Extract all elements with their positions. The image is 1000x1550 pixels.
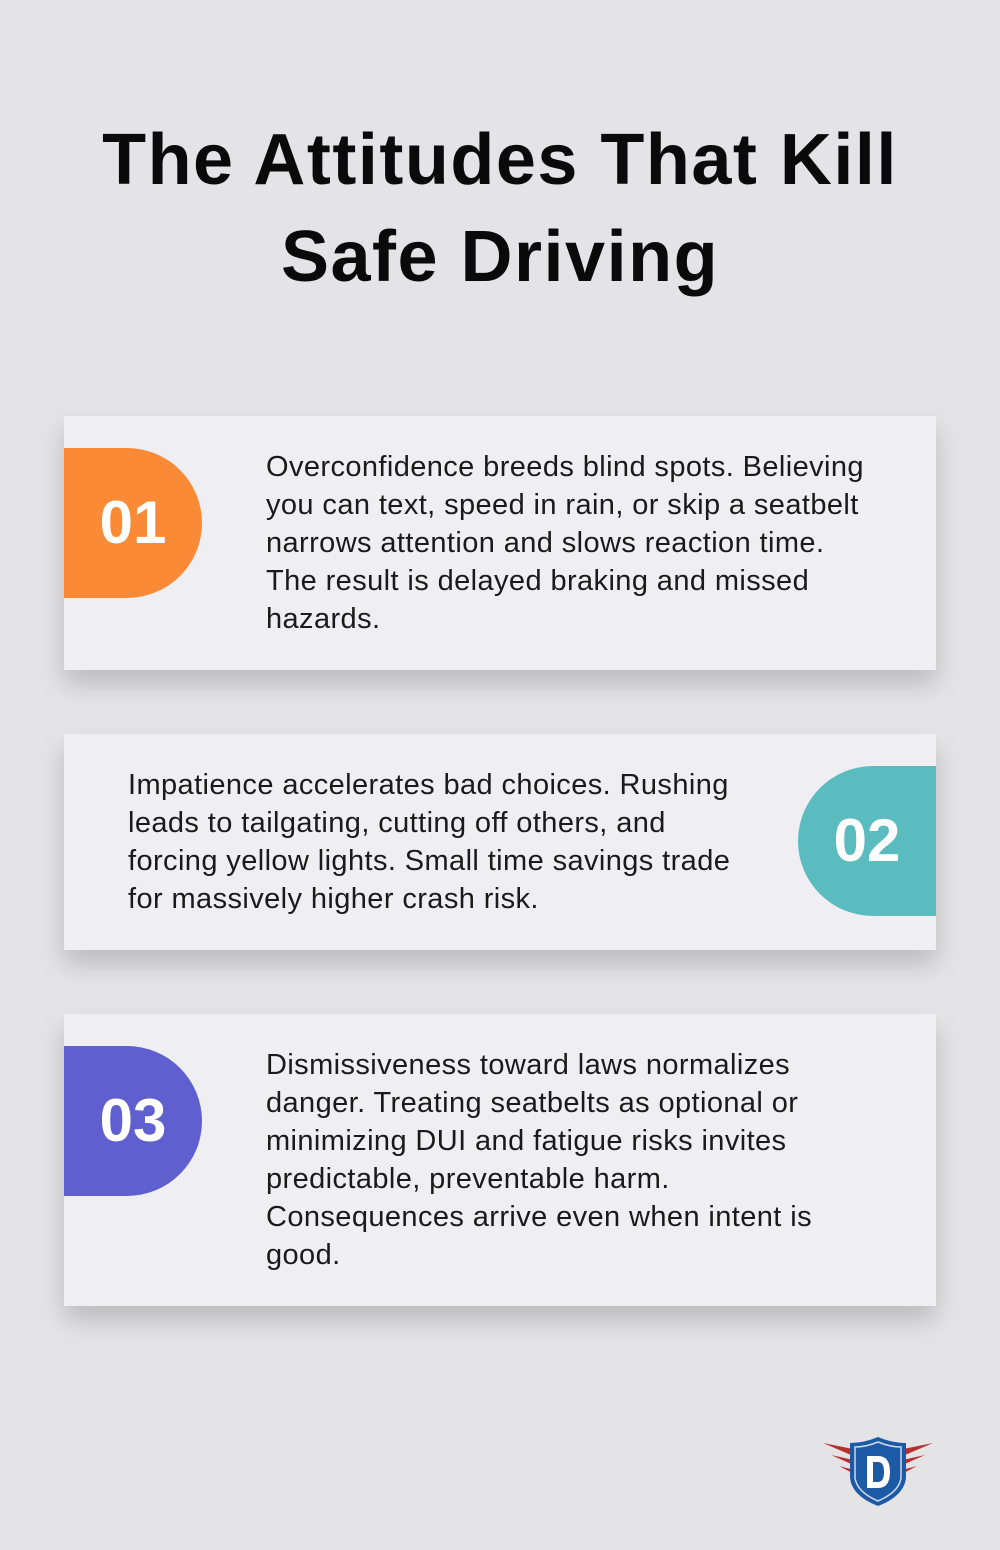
title: The Attitudes That Kill — [102, 120, 898, 200]
badge: 03 — [64, 1046, 202, 1196]
text: overconfidence: you can text, speed in rain, or skip a seatbelt — [266, 489, 859, 521]
text: dismissiveness: Consequences arrive even when intent is — [266, 1201, 812, 1233]
text: dismissiveness — [266, 1049, 812, 1271]
text: impatience — [128, 769, 730, 915]
text: dismissiveness: predictable, preventable harm. — [266, 1163, 670, 1195]
text: dismissiveness: good. — [266, 1239, 341, 1271]
text: impatience: for massively higher crash risk. — [128, 883, 539, 915]
title: Safe Driving — [281, 217, 719, 297]
title — [102, 120, 898, 297]
panel: card 01 — [64, 416, 936, 670]
text: overconfidence: hazards. — [266, 603, 380, 635]
text: dismissiveness: Dismissiveness toward laws normalizes — [266, 1049, 790, 1081]
text: impatience: leads to tailgating, cutting off others, and — [128, 807, 666, 839]
text: impatience: forcing yellow lights. Small time savings trade — [128, 845, 730, 877]
text: dismissiveness: minimizing DUI and fatigue risks invites — [266, 1125, 786, 1157]
badge: 01: 01 — [100, 489, 166, 556]
panel: card 03 — [64, 1014, 936, 1306]
panel: card 02 — [64, 734, 936, 950]
badge: 02: 02 — [834, 807, 900, 874]
text: overconfidence: narrows attention and slows reaction time. — [266, 527, 824, 559]
badge: 01 — [64, 448, 202, 598]
badge: 03: 03 — [100, 1087, 166, 1154]
text: overconfidence: Overconfidence breeds blind spots. Believing — [266, 451, 864, 483]
text: dismissiveness: danger. Treating seatbelts as optional or — [266, 1087, 798, 1119]
text: overconfidence — [266, 451, 864, 635]
text: overconfidence: The result is delayed braking and missed — [266, 565, 809, 597]
badge: 02 — [798, 766, 936, 916]
icon: logo shield — [823, 1437, 933, 1506]
text: impatience: Impatience accelerates bad choices. Rushing — [128, 769, 729, 801]
